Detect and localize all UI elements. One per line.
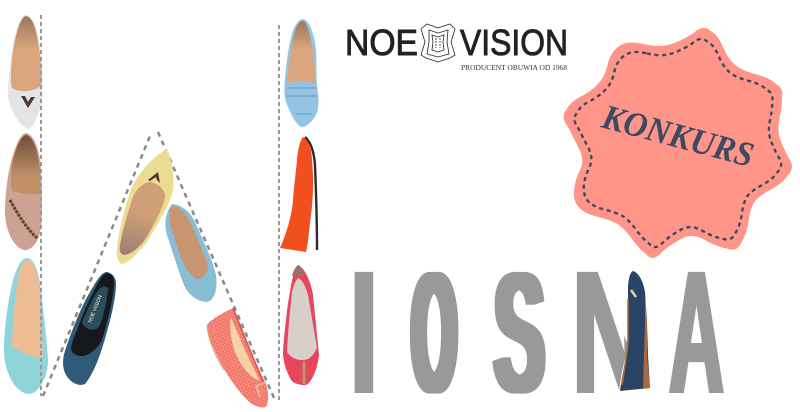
heading: IOSNA letters	[346, 233, 724, 412]
dashed line: right vertical	[278, 25, 280, 400]
shoe: white pointed flat with V ornament	[8, 15, 43, 129]
badge shape	[564, 28, 792, 258]
shoe: beige flat with chain	[5, 133, 42, 250]
logo icon: leather hide	[421, 24, 455, 62]
logo wordmark: NOE: NOE	[345, 22, 418, 63]
logo wordmark: VISION: VISION	[460, 22, 568, 63]
shoe: orange side view	[280, 137, 317, 252]
badge text: KONKURS	[597, 97, 758, 175]
dashed line: right diagonal	[158, 132, 274, 398]
shoe: aqua flat	[4, 258, 48, 394]
badge dashed stitching	[574, 39, 781, 247]
shoe: navy flat with black insole	[63, 272, 116, 385]
dashed line: left vertical	[40, 15, 42, 396]
badge: konkurs	[564, 28, 792, 258]
shoe: yellow pointed flat	[117, 149, 174, 264]
shoe: navy side view over letter N	[620, 271, 650, 391]
shoe: light blue flat	[165, 204, 217, 302]
shoe: pink flat with zipper	[283, 265, 319, 385]
dashed line: left diagonal	[43, 136, 150, 396]
logo: Noe Vision	[345, 22, 568, 72]
logo tagline: PRODUCENT OBUWIA OD 1968	[461, 64, 567, 72]
white patch behind navy shoe	[618, 264, 656, 396]
shoe: coral perforated flat	[207, 308, 268, 408]
shoe: blue loafer with tassels	[284, 19, 318, 127]
insole brand text: NOE VISION	[87, 294, 104, 324]
